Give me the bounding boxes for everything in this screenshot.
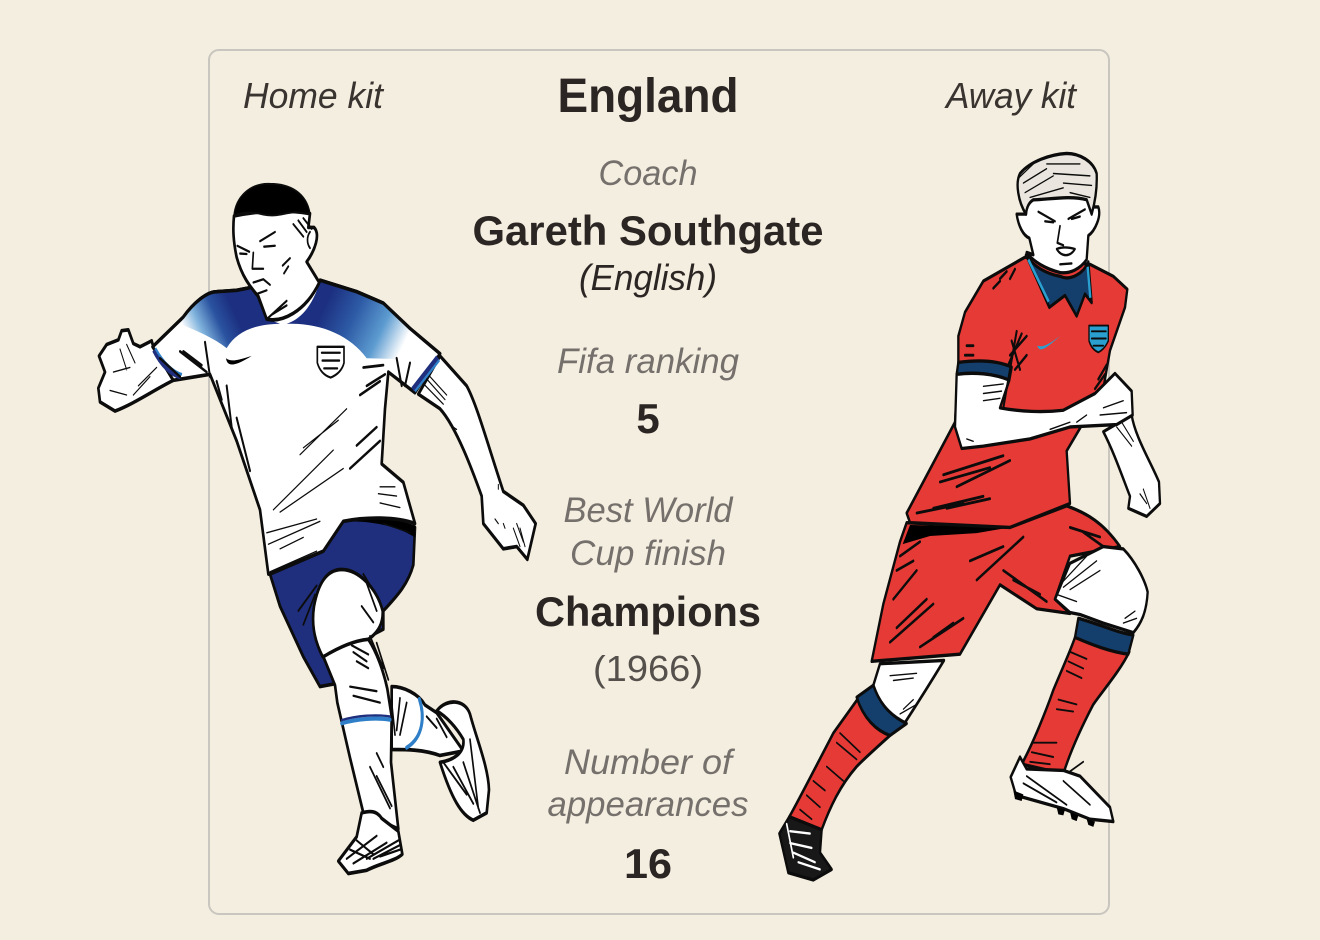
- shirt: [907, 257, 1127, 527]
- text block: best world cup finish: Champions: [535, 588, 761, 635]
- rear sock: [1022, 637, 1129, 774]
- shoulder gradient right: [287, 282, 423, 359]
- text block: number of appearances: 16: [624, 840, 672, 887]
- front sock: [323, 639, 398, 829]
- shorts: [872, 506, 1120, 661]
- text block: fifa ranking: [557, 342, 740, 442]
- text block: coach: [472, 154, 824, 298]
- illustration: away kit player: [779, 153, 1160, 880]
- title: England: [558, 70, 738, 123]
- front boot: [779, 817, 832, 880]
- swoosh: [1037, 336, 1060, 349]
- crest: [1089, 326, 1108, 352]
- neck and face: [1017, 193, 1099, 273]
- cuffs: [154, 350, 438, 389]
- shorts and leg hatching: [298, 574, 480, 813]
- shoulder gradient left: [180, 288, 280, 348]
- front boot: [338, 812, 402, 873]
- text block: best world cup finish: Best World: [564, 491, 734, 530]
- swoosh: [226, 356, 252, 365]
- far arm: [1103, 415, 1160, 516]
- text block: number of appearances: [548, 743, 748, 887]
- front sock: [789, 700, 890, 830]
- text block: fifa ranking: Fifa ranking: [557, 342, 740, 381]
- shin white: [873, 660, 944, 723]
- rear boot: [1011, 757, 1113, 822]
- heading: home kit: Home kit: [243, 75, 385, 116]
- facial features: [1038, 209, 1085, 264]
- front thigh: [313, 570, 383, 657]
- left arm and fist: [98, 330, 173, 411]
- shorts: [270, 519, 415, 687]
- face and neck: [233, 211, 319, 320]
- text block: coach: Gareth Southgate: [472, 207, 824, 254]
- shirt and shorts hatching: [890, 269, 1107, 647]
- hair: [1018, 153, 1097, 214]
- away player outline redraw: [872, 513, 960, 661]
- thigh and knee: [1055, 547, 1148, 633]
- knee sock band: [1075, 618, 1133, 654]
- shirt: [153, 280, 440, 574]
- facial features: [237, 218, 312, 319]
- shirt fold hatching: [160, 342, 410, 471]
- boot studs: [1013, 790, 1095, 827]
- text block: coach: Coach: [598, 154, 698, 193]
- illustration: home kit player: [98, 184, 536, 873]
- rear leg: [392, 687, 463, 755]
- text block: coach: (English): [579, 257, 717, 298]
- panel frame: [209, 50, 1109, 914]
- rear boot: [437, 702, 489, 820]
- waist shadow: [903, 525, 1010, 544]
- sleeve cuff: [957, 361, 1012, 380]
- text block: fifa ranking: 5: [636, 395, 660, 442]
- text block: number of appearances: Number of: [564, 743, 735, 782]
- hair: [234, 184, 310, 216]
- right arm: [418, 356, 536, 559]
- text block: best world cup finish: (1966): [593, 648, 703, 689]
- front sock band: [857, 685, 907, 735]
- text block: number of appearances: appearances: [548, 785, 748, 824]
- shirt outline top: [153, 280, 440, 354]
- waistband shadow: [347, 518, 415, 537]
- crest: [317, 347, 344, 378]
- heading: away kit: Away kit: [944, 75, 1078, 116]
- text block: best world cup finish: Cup finish: [570, 534, 726, 573]
- collar: [1026, 255, 1092, 316]
- front arm: [955, 373, 1133, 449]
- sock band: [342, 719, 390, 723]
- text block: best world cup finish: [535, 491, 761, 689]
- sock hatching: [800, 652, 1090, 819]
